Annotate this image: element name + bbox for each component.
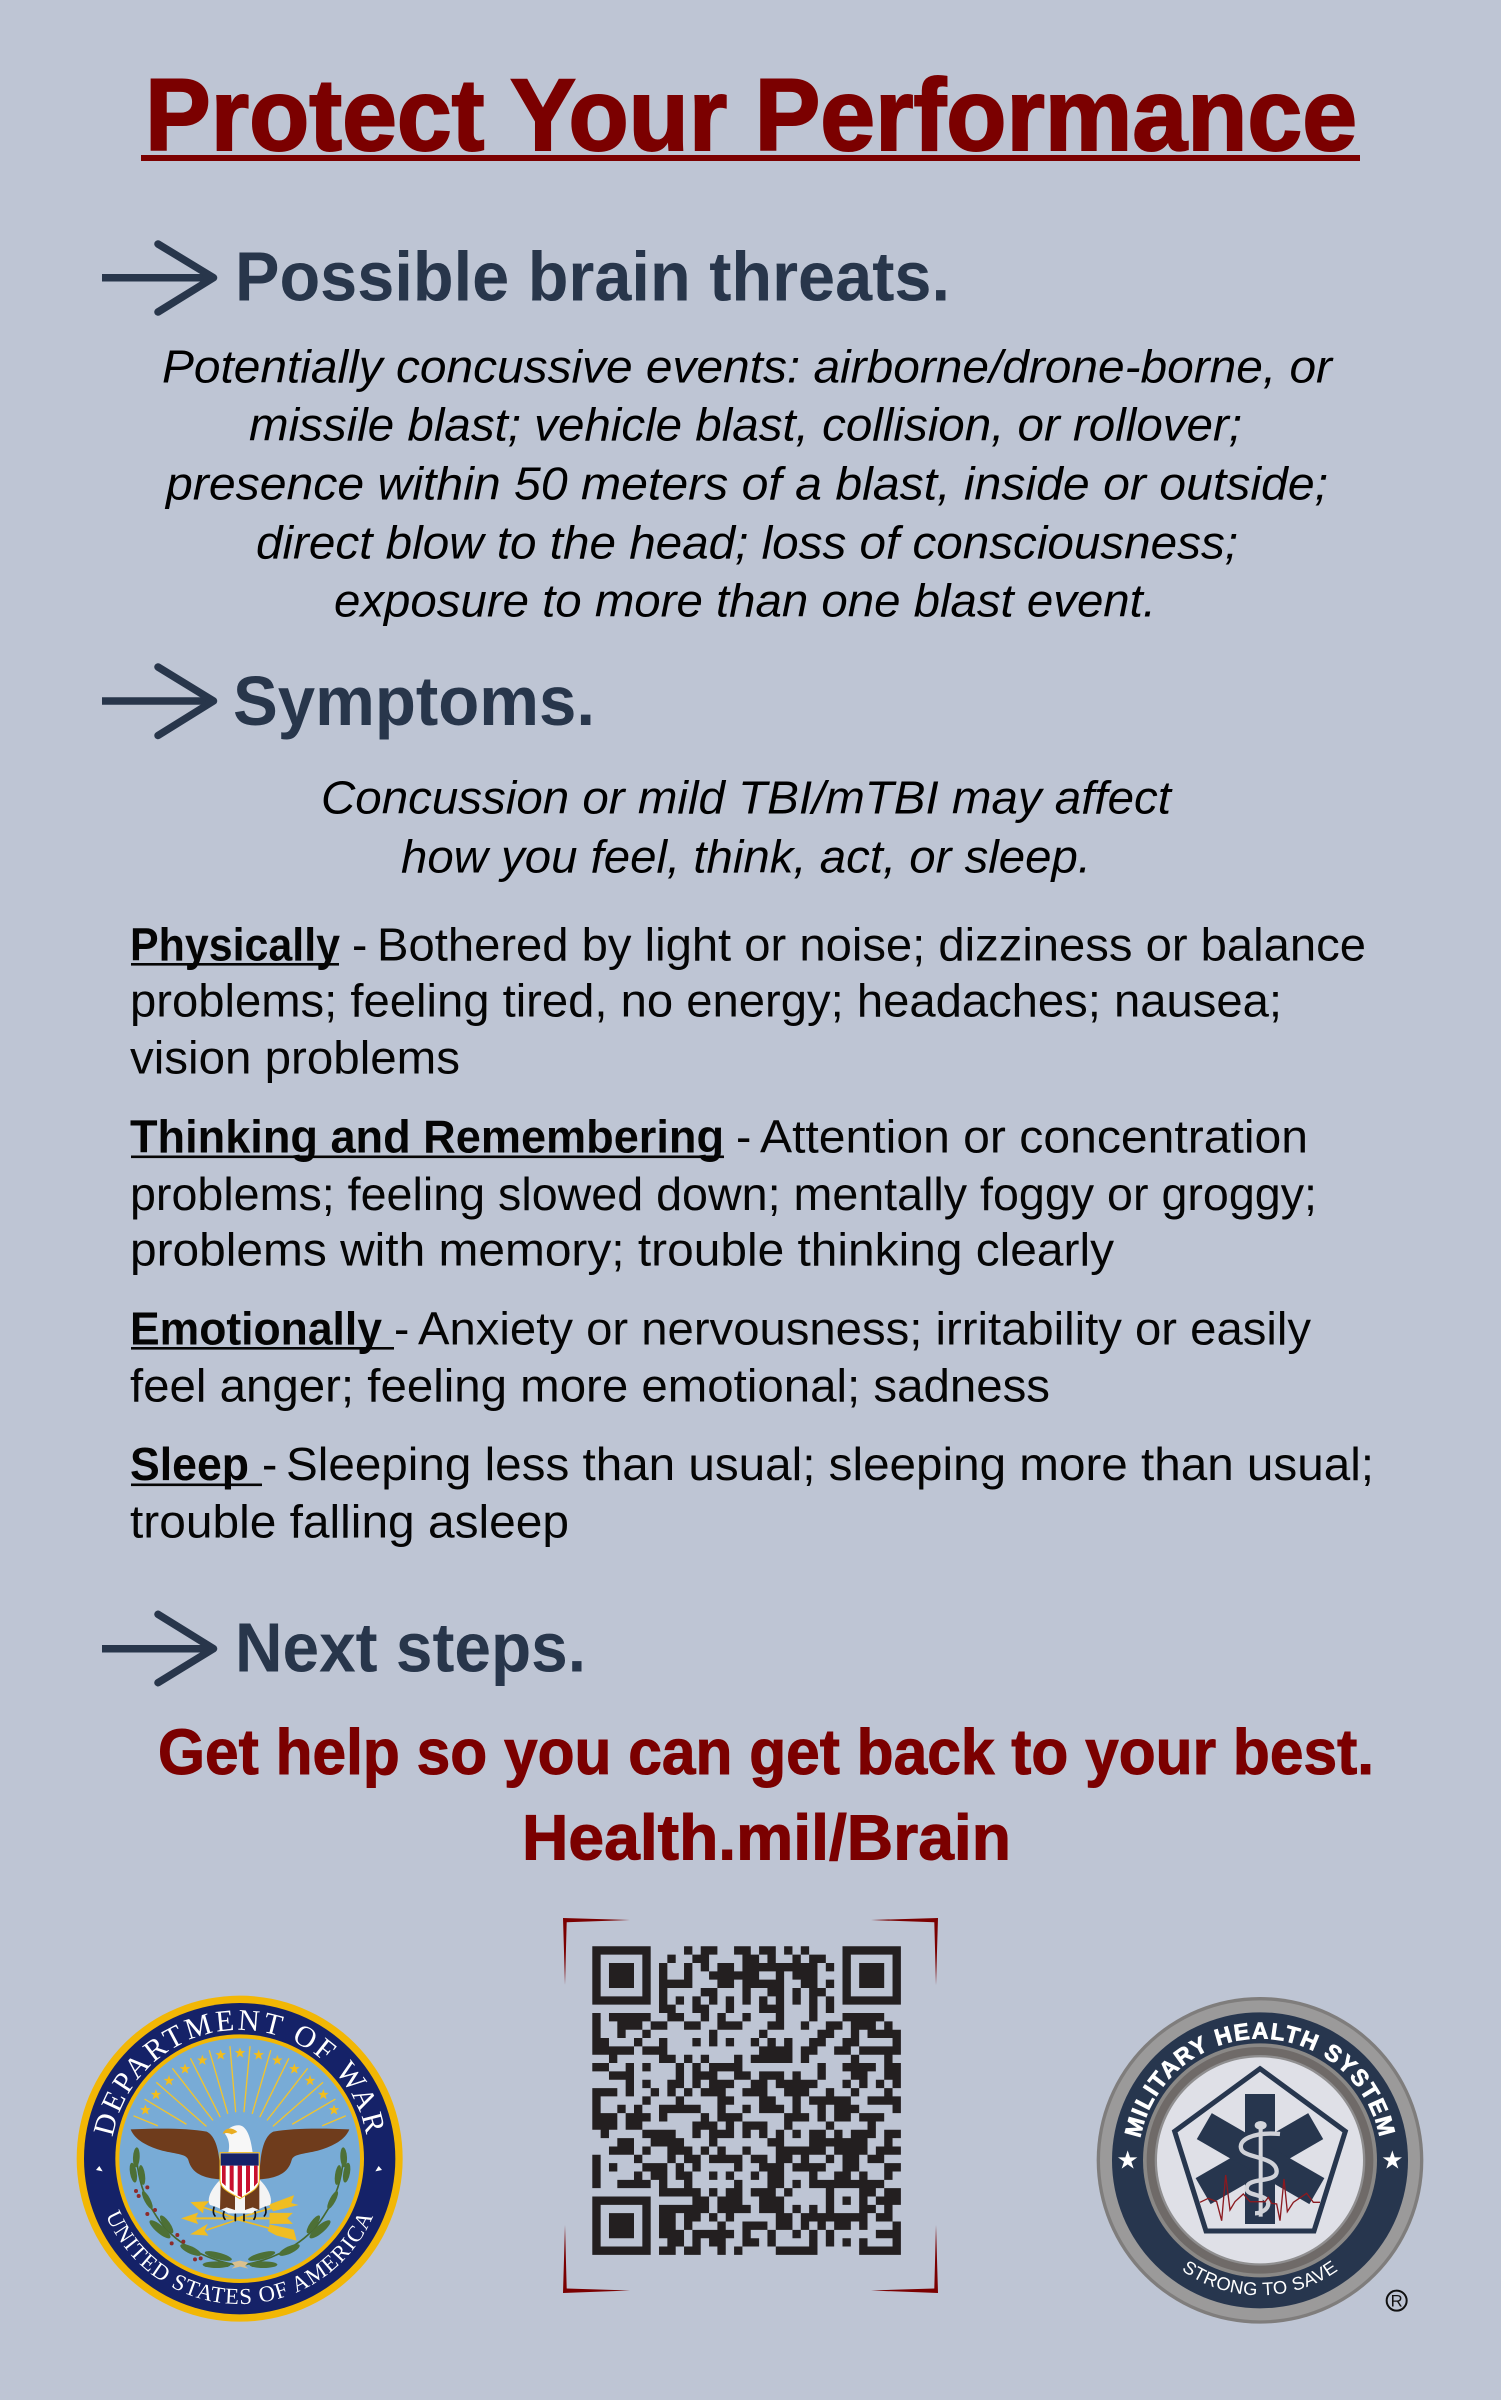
arrow: possible brain threats	[102, 244, 214, 312]
text block: thinking and remembering: Attention or concentration	[760, 1110, 1308, 1162]
text block: potentially concussive events	[162, 340, 1334, 627]
seal eagle	[131, 2125, 349, 2221]
heading: next steps: Next steps.	[235, 1609, 586, 1687]
heading: symptoms: Symptoms.	[233, 662, 595, 740]
text block: concussion intro: Concussion or mild TBI/mTBI may affect	[321, 771, 1173, 823]
registered mark: R	[1391, 2292, 1403, 2311]
seal arrows	[183, 2196, 297, 2240]
text block: emotionally: Anxiety or nervousness; irritability or easily	[418, 1302, 1311, 1354]
text block: sleep: -	[262, 1438, 277, 1490]
pentagon and star of life	[1175, 2069, 1345, 2231]
text block: thinking and remembering: Thinking and Remembering	[130, 1110, 724, 1162]
text block: thinking and remembering: problems with memory; trouble thinking clearly	[130, 1224, 1114, 1276]
text block: potentially concussive events: direct blow to the head; loss of consciousness;	[256, 516, 1238, 568]
text block: emotionally	[130, 1302, 1311, 1412]
qr code	[592, 1946, 901, 2255]
seal text: united states of america: UNITED STATES OF AMERICA	[108, 2209, 374, 2304]
text block: potentially concussive events: Potentially concussive events: airborne/drone-borne, or	[162, 340, 1334, 392]
text block: emotionally: -	[394, 1302, 409, 1354]
text block: potentially concussive events: missile blast; vehicle blast, collision, or rollover;	[249, 399, 1242, 451]
text block: physically: -	[352, 919, 367, 971]
seal wreath	[128, 2147, 352, 2269]
text block: concussion intro: how you feel, think, act, or sleep.	[401, 831, 1091, 883]
text block: potentially concussive events: exposure to more than one blast event.	[334, 575, 1156, 627]
seal text: strong to save: STRONG TO SAVE	[1183, 2260, 1338, 2296]
call to action: Get help so you can get back to your best.	[158, 1716, 1374, 1788]
text block: physically: vision problems	[130, 1031, 460, 1083]
seal: Military Health System	[1096, 1997, 1424, 2324]
arrow: next steps	[102, 1614, 214, 1683]
text block: potentially concussive events: presence within 50 meters of a blast, inside or outside;	[164, 457, 1328, 509]
qr code frame	[563, 1918, 938, 2293]
seal stars	[140, 2047, 339, 2115]
heading: possible brain threats: Possible brain threats.	[235, 238, 950, 316]
text block: thinking and remembering	[130, 1110, 1317, 1276]
text block: physically: problems; feeling tired, no energy; headaches; nausea;	[130, 974, 1282, 1026]
text block: physically	[130, 919, 1366, 1083]
seal rays	[134, 2047, 345, 2126]
registered mark	[1387, 2291, 1407, 2311]
text block: thinking and remembering: -	[736, 1110, 751, 1162]
seal: Department of War	[76, 1996, 403, 2322]
seal text: military health system: MILITARY HEALTH SYSTEM	[1124, 2022, 1396, 2138]
text block: sleep	[130, 1438, 1374, 1547]
text block: concussion intro	[321, 771, 1173, 883]
arrow: symptoms	[102, 667, 214, 736]
website link: Health.mil/Brain	[522, 1801, 1011, 1873]
seal text: department of war: DEPARTMENT OF WAR	[94, 2010, 384, 2136]
title: Protect Your Performance	[145, 58, 1357, 172]
seal stars	[1118, 2150, 1402, 2169]
text block: sleep: Sleep	[130, 1438, 249, 1490]
text block: emotionally: Emotionally	[130, 1302, 382, 1354]
text block: sleep: trouble falling asleep	[130, 1495, 569, 1547]
text block: emotionally: feel anger; feeling more emotional; sadness	[130, 1360, 1050, 1412]
text block: sleep: Sleeping less than usual; sleeping more than usual;	[286, 1438, 1374, 1490]
text block: thinking and remembering: problems; feeling slowed down; mentally foggy or groggy;	[130, 1168, 1317, 1220]
text block: physically: Bothered by light or noise; dizziness or balance	[377, 919, 1366, 971]
text block: physically: Physically	[130, 919, 340, 971]
